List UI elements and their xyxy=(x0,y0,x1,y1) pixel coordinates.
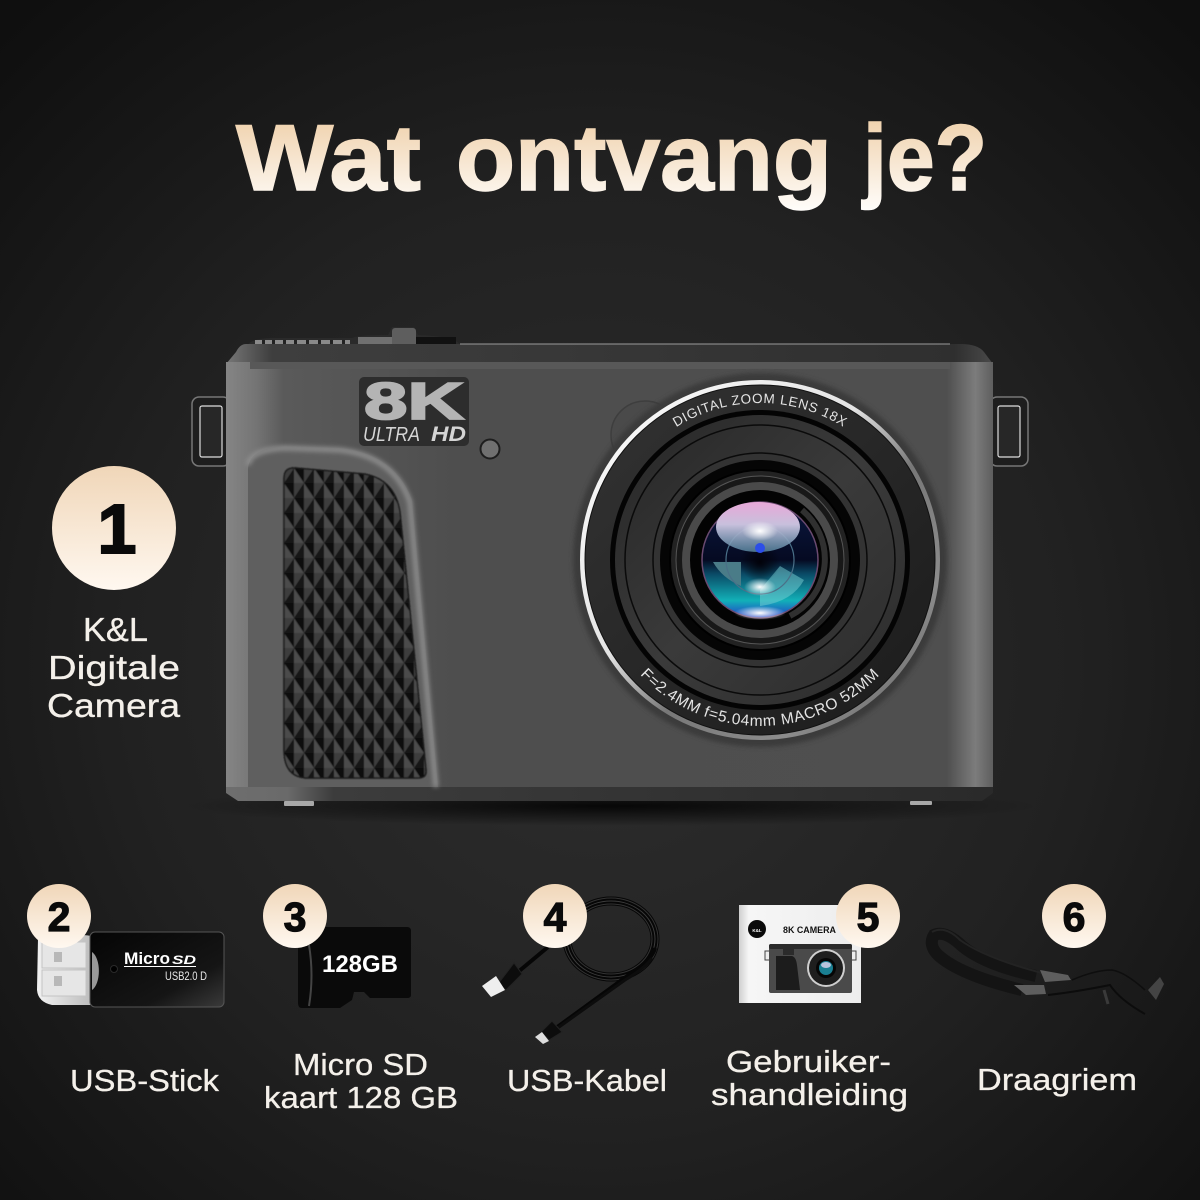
camera shadow xyxy=(180,786,1040,826)
badge 4 xyxy=(523,884,587,948)
badge 2 xyxy=(27,884,91,948)
flash bump xyxy=(611,401,679,469)
lens text top: DIGITAL ZOOM LENS 18X xyxy=(672,394,848,427)
8K badge: HD xyxy=(431,423,466,446)
item: strap xyxy=(932,930,1164,1014)
strap lug left xyxy=(192,397,230,466)
label: manual xyxy=(711,1044,908,1112)
item: USB reader: SD xyxy=(172,953,196,967)
label: manual: Gebruiker- xyxy=(726,1044,891,1079)
badge 1 xyxy=(52,466,176,590)
badge 6 xyxy=(1042,884,1106,948)
item: micro SD card xyxy=(298,927,411,1008)
badge 1: 1 xyxy=(98,490,136,568)
top dials xyxy=(226,327,993,364)
title: je? xyxy=(861,105,987,210)
item: manual: K&L xyxy=(752,928,762,933)
title xyxy=(236,105,987,210)
label: camera xyxy=(47,611,181,724)
upper body highlight xyxy=(250,362,950,369)
label: strap: Draagriem xyxy=(977,1062,1137,1097)
label: USB-Stick: USB-Stick xyxy=(70,1063,220,1098)
lens xyxy=(572,372,948,748)
item: USB cable xyxy=(482,898,658,1044)
item: manual: 8K CAMERA xyxy=(783,925,836,935)
badge 5: 5 xyxy=(857,894,879,940)
item: manual xyxy=(739,905,861,1003)
label: camera: K&L xyxy=(83,611,148,648)
item: USB reader: USB2.0 D xyxy=(165,971,207,983)
badge 3: 3 xyxy=(284,894,306,940)
label: camera: Camera xyxy=(47,687,181,724)
feet xyxy=(284,801,932,806)
8K badge xyxy=(359,373,469,446)
badge 6: 6 xyxy=(1063,894,1085,940)
lens text bottom: F=2.4MM f=5.04mm MACRO 52MM xyxy=(641,668,879,726)
title: ontvang xyxy=(456,105,832,210)
item: micro SD card: 128GB xyxy=(322,951,398,978)
badge 2: 2 xyxy=(48,894,70,940)
camera xyxy=(191,328,1029,821)
label: manual: shandleiding xyxy=(711,1077,908,1112)
grip ridge xyxy=(248,446,438,787)
badge 4: 4 xyxy=(544,894,567,940)
item: USB reader xyxy=(37,932,224,1007)
label: micro SD xyxy=(264,1047,458,1115)
label: camera: Digitale xyxy=(48,649,180,686)
grip texture xyxy=(284,468,426,778)
label: micro SD: Micro SD xyxy=(293,1047,428,1082)
badge 5 xyxy=(836,884,900,948)
title: Wat xyxy=(236,105,421,210)
badge 3 xyxy=(263,884,327,948)
strap lug right xyxy=(990,397,1028,466)
camera body xyxy=(226,362,993,788)
8K badge: ULTRA xyxy=(363,424,420,446)
label: micro SD: kaart 128 GB xyxy=(264,1080,458,1115)
item: USB reader: Micro xyxy=(124,949,170,968)
bottom band xyxy=(226,787,993,801)
lens glass xyxy=(702,502,818,620)
sensor dot xyxy=(480,440,500,458)
label: USB-Kabel: USB-Kabel xyxy=(507,1063,667,1098)
8K badge: 8K xyxy=(364,373,465,431)
